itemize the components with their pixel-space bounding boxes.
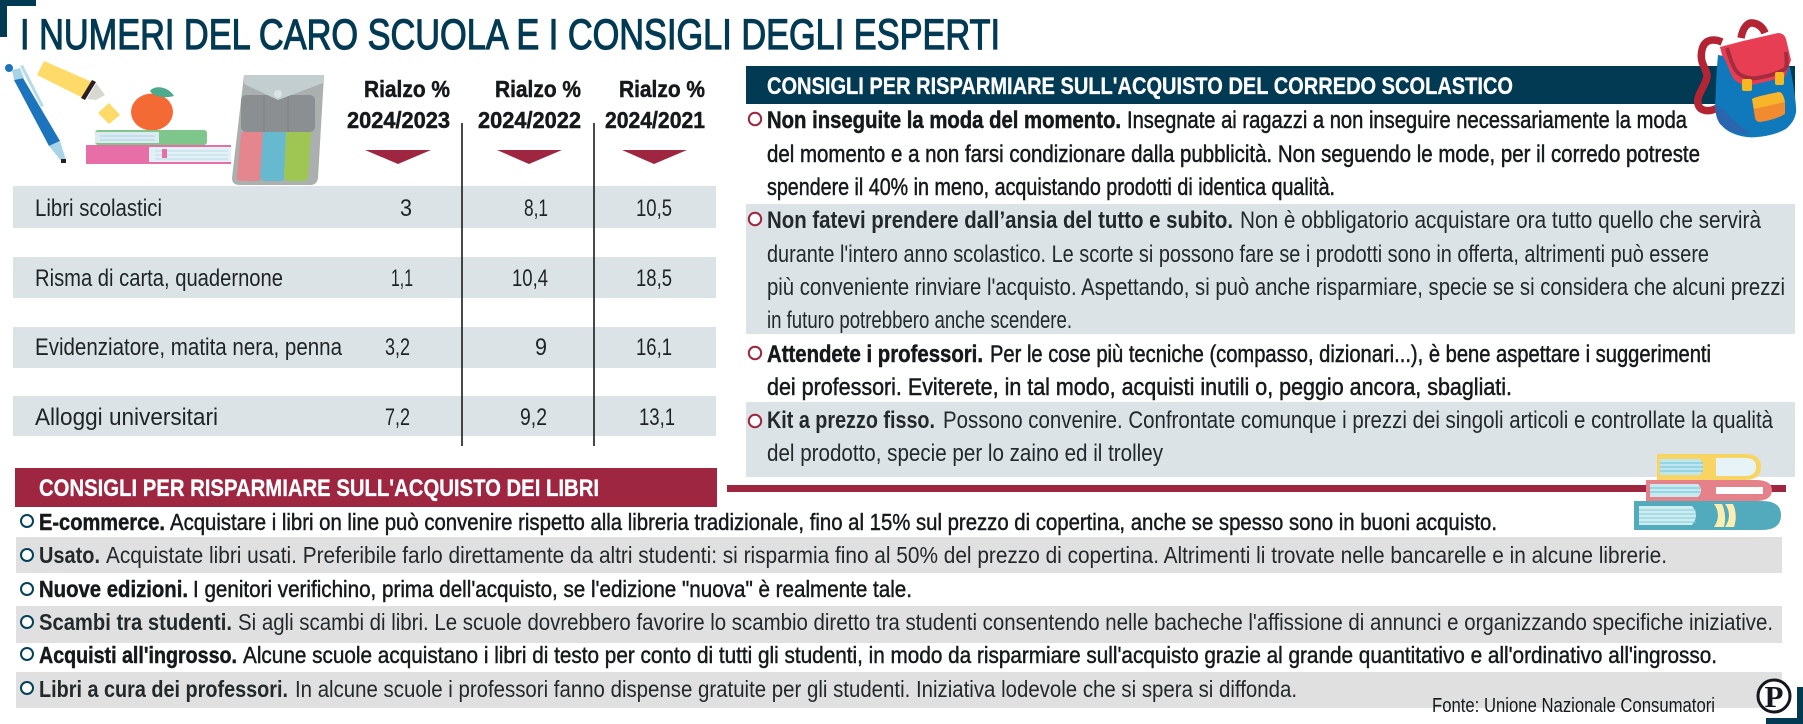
tip: ansia del tutto e subito: Non fatevi prendere dall’ansia del tutto e subito. <box>767 207 1233 234</box>
heading: corredo scolastico <box>746 66 1795 104</box>
row: alloggi universitari: Alloggi universitari <box>35 404 218 431</box>
tip: scambi tra studenti: Scambi tra studenti. <box>39 609 232 635</box>
icon: school supplies <box>5 61 324 185</box>
icon: pen <box>5 64 66 163</box>
tip: attendete i professori: dei professori. Eviterete, in tal modo, acquisti inutili o, peggio ancora, sbagliati. <box>767 374 1512 401</box>
row: evidenziatore <box>35 334 672 361</box>
row: risma di carta: Risma di carta, quadernone <box>35 265 283 292</box>
column header: 2024/2021: Rialzo % <box>619 76 705 102</box>
column header: 2024/2022: Rialzo % <box>495 76 581 102</box>
tip: kit a prezzo fisso: Kit a prezzo fisso. <box>767 407 935 434</box>
row: risma di carta: 10,4 <box>512 265 548 292</box>
row: risma di carta: 1,1 <box>391 265 413 292</box>
row: libri scolastici: 10,5 <box>636 195 672 222</box>
title: I NUMERI DEL CARO SCUOLA E I CONSIGLI DEGLI ESPERTI <box>20 11 1000 59</box>
tip: usato: Acquistate libri usati. Preferibile farlo direttamente da altri studenti: si risparmia fino al 50% del prezzo di copertina. Altrimenti li trovate nelle bancarelle e in alcune librerie. <box>106 542 1667 568</box>
column header: 2024/2022 <box>478 76 581 164</box>
row: alloggi universitari: 13,1 <box>639 404 675 431</box>
tip: e-commerce: Acquistare i libri on line può convenire rispetto alla libreria tradizionale, fino al 15% sul prezzo di copertina, anche se spesso sono in buoni acquisto. <box>170 509 1497 535</box>
tip: attendete i professori: Attendete i professori. <box>767 341 983 368</box>
column header: 2024/2021 <box>605 76 705 164</box>
icon: stacked books <box>86 130 231 164</box>
tip: nuove edizioni: Nuove edizioni. <box>39 576 188 602</box>
row: alloggi universitari <box>35 404 675 431</box>
icon: pencil pouch <box>232 75 324 185</box>
row: risma di carta: 18,5 <box>636 265 672 292</box>
corner mark: top left <box>0 0 36 37</box>
tip: kit a prezzo fisso: del prodotto, specie per lo zaino ed il trolley <box>767 440 1163 467</box>
heading: corredo scolastico: CONSIGLI PER RISPARMIARE SULL'ACQUISTO DEL CORREDO SCOLASTICO <box>767 73 1513 100</box>
tip: non inseguite la moda <box>749 107 1700 201</box>
table: price increases <box>13 76 716 446</box>
tip: nuove edizioni: I genitori verifichino, prima dell'acquisto, se l'edizione "nuova" è realmente tale. <box>193 576 912 602</box>
tip: non inseguite la moda: Non inseguite la moda del momento. <box>767 107 1121 134</box>
column header: 2024/2021: 2024/2021 <box>605 107 705 133</box>
row: libri scolastici <box>35 195 672 222</box>
tip: acquisti all'ingrosso: Acquisti all'ingrosso. <box>39 642 237 668</box>
tip: kit a prezzo fisso <box>749 407 1774 467</box>
tip: libri a cura dei professori: In alcune scuole i professori fanno dispense gratuite per gli studenti. Iniziativa lodevole che si spera si diffonda. <box>295 676 1297 702</box>
corner mark: bottom right <box>1766 687 1803 724</box>
source credit: Fonte: Unione Nazionale Consumatori <box>1432 695 1715 717</box>
panel: corredo scolastico <box>746 66 1795 477</box>
row: evidenziatore: 3,2 <box>385 334 410 361</box>
icon: backpack <box>1698 23 1796 137</box>
tip: usato: Usato. <box>39 542 100 568</box>
row: alloggi universitari: 9,2 <box>520 404 547 431</box>
heading: acquisto dei libri: CONSIGLI PER RISPARMIARE SULL'ACQUISTO DEI LIBRI <box>39 475 599 502</box>
icon: apple <box>131 87 174 130</box>
column header: 2024/2023 <box>347 76 450 164</box>
tip: attendete i professori <box>749 341 1711 401</box>
column header: 2024/2023: Rialzo % <box>364 76 450 102</box>
heading: acquisto dei libri <box>15 468 717 507</box>
panel: acquisto dei libri <box>15 468 1782 708</box>
column header: 2024/2022: 2024/2022 <box>478 107 581 133</box>
row: libri scolastici: 3 <box>400 195 412 222</box>
row: risma di carta <box>35 265 672 292</box>
icon: publisher logo: P <box>1765 679 1784 714</box>
row: libri scolastici: 8,1 <box>524 195 548 222</box>
tip: ansia del tutto e subito <box>749 207 1785 334</box>
table row backgrounds <box>13 186 716 436</box>
row: libri scolastici: Libri scolastici <box>35 195 162 222</box>
tip: non inseguite la moda: spendere il 40% in meno, acquistando prodotti di identica qualità. <box>767 174 1335 201</box>
icon: stack of books <box>1634 454 1781 530</box>
tip: libri a cura dei professori: Libri a cura dei professori. <box>39 676 288 702</box>
row: evidenziatore: Evidenziatore, matita nera, penna <box>35 334 343 361</box>
icon: publisher logo <box>1758 679 1790 714</box>
tip: e-commerce: E-commerce. <box>39 509 165 535</box>
icon: highlighter <box>37 61 120 124</box>
tip: ansia del tutto e subito: in futuro potrebbero anche scendere. <box>767 307 1072 334</box>
row: evidenziatore: 9 <box>535 334 547 361</box>
row: evidenziatore: 16,1 <box>636 334 672 361</box>
column header: 2024/2023: 2024/2023 <box>347 107 450 133</box>
tip: non inseguite la moda: Insegnate ai ragazzi a non inseguire necessariamente la moda <box>1127 107 1688 134</box>
row: alloggi universitari: 7,2 <box>385 404 410 431</box>
divider: burgundy rule <box>727 485 1786 492</box>
